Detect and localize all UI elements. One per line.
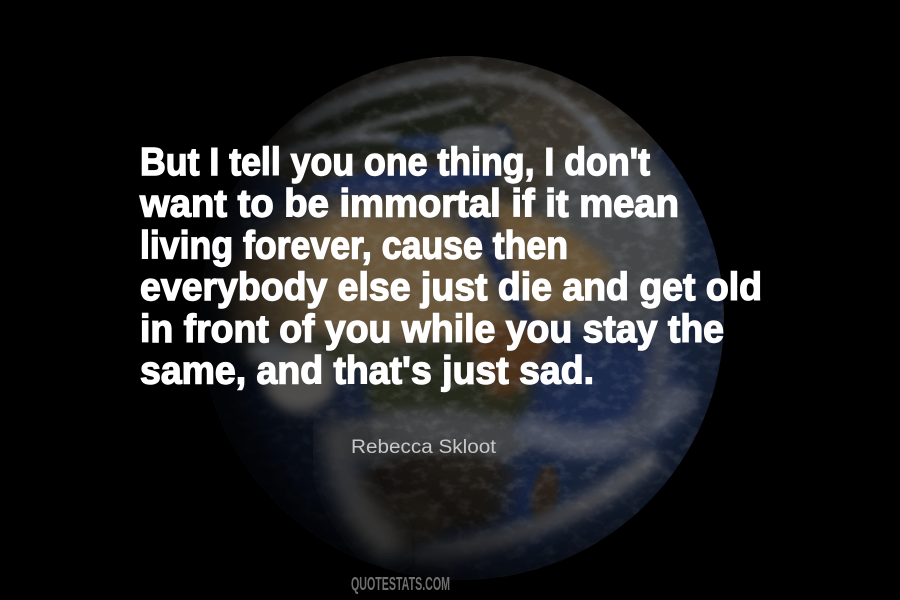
globe image — [190, 45, 730, 590]
red sea — [470, 215, 535, 335]
atlantic — [204, 368, 369, 563]
quote text: same, and that's just sad. — [140, 350, 594, 392]
arabian peninsula — [490, 200, 612, 323]
quote text: But I tell you one thing, I don't — [140, 141, 650, 184]
eurasia land — [240, 45, 685, 340]
cloud texture — [274, 56, 724, 580]
cloud along african west coast — [335, 430, 390, 545]
overall dimming — [242, 56, 724, 554]
sahara — [222, 203, 522, 360]
mediterranean and black sea — [309, 123, 514, 202]
left dark falloff — [200, 96, 624, 580]
quote text: want to be immortal if it mean — [139, 183, 679, 226]
indian ocean — [506, 340, 685, 550]
cloud bands in the north — [262, 72, 650, 230]
ocean base — [200, 56, 724, 580]
quote text: in front of you while you stay the — [140, 308, 724, 351]
cloud over gulf of guinea — [248, 339, 336, 412]
quote poster — [139, 56, 760, 594]
author: Rebecca Skloot — [351, 437, 497, 458]
madagascar — [529, 464, 560, 518]
terminator shading — [200, 56, 724, 580]
quote text — [139, 141, 762, 392]
quote text: everybody else just die and get old — [140, 266, 762, 309]
central africa — [288, 318, 558, 540]
quote text: living forever, cause then — [140, 224, 568, 267]
southern clouds — [420, 330, 680, 555]
watermark: QUOTESTATS.COM — [351, 574, 450, 594]
